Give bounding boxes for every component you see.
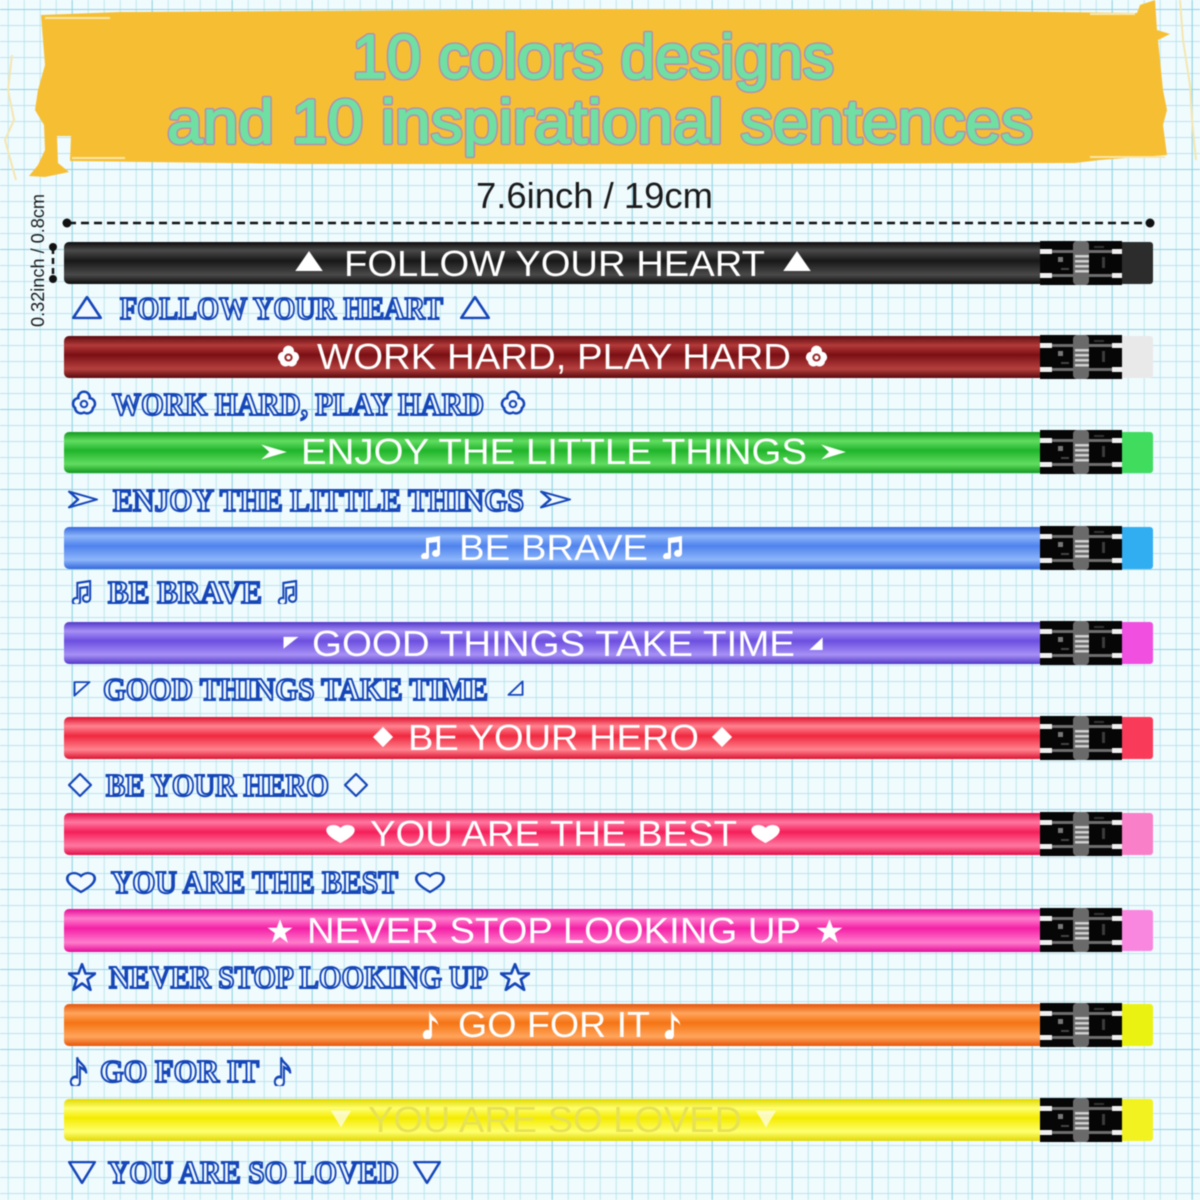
pencil: black, follow your heart: FOLLOW YOUR HEART: [344, 243, 765, 284]
pencil: maroon, work hard play hard: [64, 335, 1153, 379]
pencil: red, be your hero: BE YOUR HERO: [408, 717, 699, 758]
title banner: yellow brush stroke: [29, 0, 1170, 177]
label: go for it: GO FOR IT: [100, 1053, 259, 1089]
pencil: crimson, you are the best: [64, 812, 1153, 856]
title text: [167, 23, 1033, 157]
title text: 10 colors designs: [352, 23, 834, 92]
pencil: maroon, work hard play hard: WORK HARD, PLAY HARD: [317, 336, 791, 377]
pencil: magenta, never stop looking up: NEVER STOP LOOKING UP: [307, 910, 801, 951]
label: you are the best: YOU ARE THE BEST: [111, 864, 398, 900]
pencil: magenta, never stop looking up: [64, 908, 1153, 952]
pencil: blue, be brave: BE BRAVE: [459, 527, 648, 568]
pencil: crimson, you are the best: YOU ARE THE BEST: [370, 813, 737, 854]
pencil: purple, good things take time: [64, 621, 1153, 665]
pencil: purple, good things take time: GOOD THINGS TAKE TIME: [312, 623, 795, 664]
label: work hard play hard: WORK HARD, PLAY HARD: [112, 386, 484, 422]
title text: and 10 inspirational sentences: [167, 88, 1033, 157]
width dimension line: [62, 218, 1154, 228]
pencil: black, follow your heart: [64, 241, 1153, 285]
pencil: yellow, you are so loved: YOU ARE SO LOVED: [368, 1099, 742, 1140]
title text: and 10 inspirational sentences: [167, 88, 1033, 157]
pencil: orange, go for it: [64, 1003, 1153, 1047]
pencil: red, be your hero: [64, 716, 1153, 760]
label: never stop looking up: NEVER STOP LOOKING UP: [109, 959, 488, 995]
label: you are so loved: YOU ARE SO LOVED: [108, 1154, 399, 1190]
pencil: green, enjoy the little things: ENJOY THE LITTLE THINGS: [301, 431, 807, 472]
label: good things take time: GOOD THINGS TAKE TIME: [103, 671, 488, 707]
width dimension label: 7.6inch / 19cm: [476, 175, 713, 216]
label: enjoy the little things: ENJOY THE LITTLE THINGS: [113, 482, 524, 518]
label: be your hero: BE YOUR HERO: [106, 767, 329, 803]
pencil: green, enjoy the little things: [64, 430, 1153, 474]
pencil: blue, be brave: [64, 526, 1153, 570]
label: be brave: BE BRAVE: [108, 574, 262, 610]
thickness dimension line: [49, 243, 57, 283]
title text: 10 colors designs: [352, 23, 834, 92]
pencil: orange, go for it: GO FOR IT: [458, 1004, 650, 1045]
pencil: yellow, you are so loved: [64, 1098, 1153, 1142]
label: follow your heart: FOLLOW YOUR HEART: [120, 290, 443, 326]
thickness dimension label: 0.32inch / 0.8cm: [28, 194, 48, 327]
